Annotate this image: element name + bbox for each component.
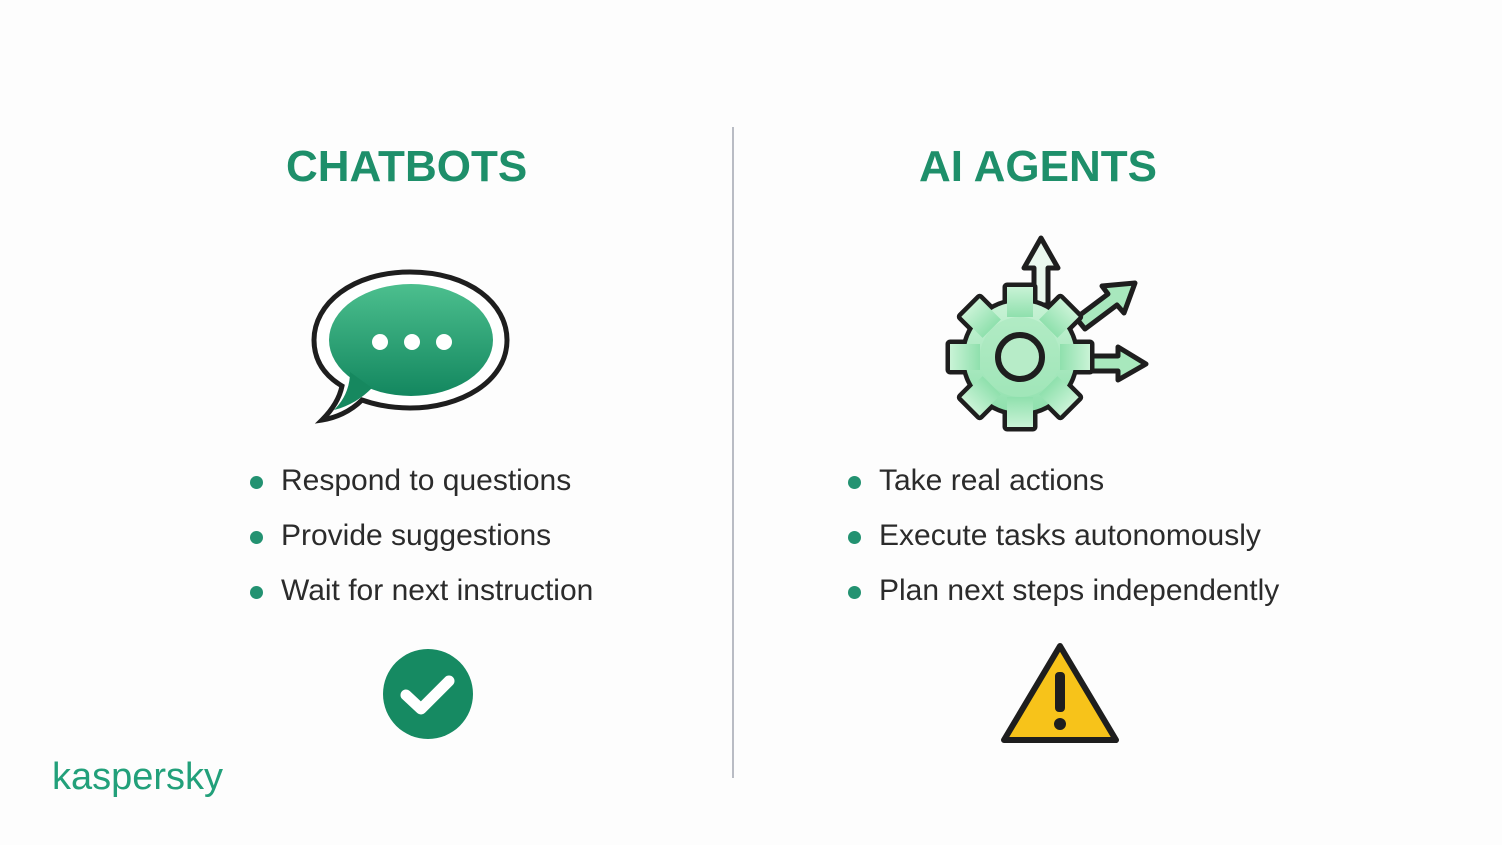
list: ai agents xyxy=(848,464,1280,607)
list: chatbots: Respond to questions xyxy=(281,464,571,497)
icon: chat bubble xyxy=(312,270,510,424)
title: ai agents: AI AGENTS xyxy=(919,142,1157,191)
list: chatbots: Wait for next instruction xyxy=(281,574,593,607)
icon: warning xyxy=(1001,643,1119,743)
logo: kaspersky xyxy=(52,756,223,798)
list: chatbots xyxy=(250,464,593,607)
list: ai agents: Execute tasks autonomously xyxy=(879,519,1261,552)
divider xyxy=(732,127,734,778)
icon: check xyxy=(383,649,473,739)
list: chatbots: Provide suggestions xyxy=(281,519,551,552)
arrows xyxy=(1024,238,1058,305)
list: ai agents: Plan next steps independently xyxy=(879,574,1279,607)
list: ai agents: Take real actions xyxy=(879,464,1104,497)
icon: gear with arrows xyxy=(946,236,1148,432)
title: chatbots: CHATBOTS xyxy=(286,142,527,191)
